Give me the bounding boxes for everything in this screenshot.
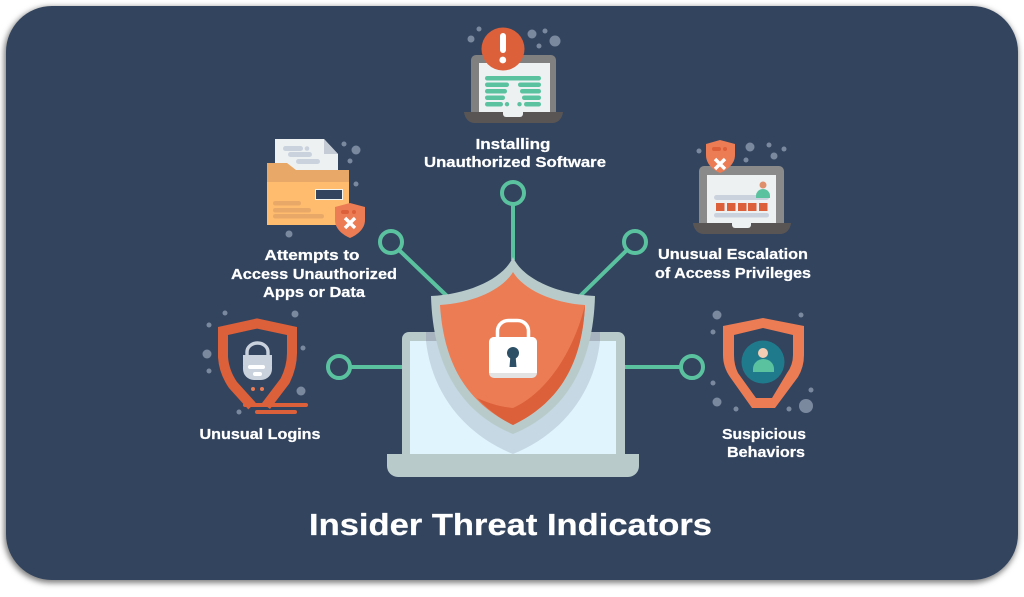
icon: laptop with access privileges [693,140,791,234]
icon: shield with user [710,310,814,413]
connector lines and nodes [328,182,703,378]
icon: laptop with alert [464,26,563,123]
label: attempts to access unauthorized apps or data: Apps or Data [263,284,366,301]
title: Insider Threat Indicators [309,507,712,542]
icon: shield with lock [202,310,306,414]
label: unusual logins: Unusual Logins [200,426,320,443]
label: attempts to access unauthorized apps or data: Attempts to [264,247,360,264]
label: suspicious behaviors: Behaviors [727,444,805,461]
central shield [426,257,600,454]
label: unusual escalation of access privileges [655,246,811,282]
label: unusual escalation of access privileges: Unusual Escalation [658,246,808,263]
icon: padlock [489,320,537,378]
label: unusual escalation of access privileges: of Access Privileges [655,265,811,282]
label: installing unauthorized software: Unauthorized Software [424,154,606,171]
label: attempts to access unauthorized apps or data [231,247,397,301]
label: installing unauthorized software [424,136,606,171]
central laptop [387,332,639,477]
icon: folder with document [267,139,365,238]
label: installing unauthorized software: Installing [476,136,550,153]
label: suspicious behaviors [722,426,806,461]
label: suspicious behaviors: Suspicious [722,426,806,443]
label: attempts to access unauthorized apps or data: Access Unauthorized [231,266,397,283]
